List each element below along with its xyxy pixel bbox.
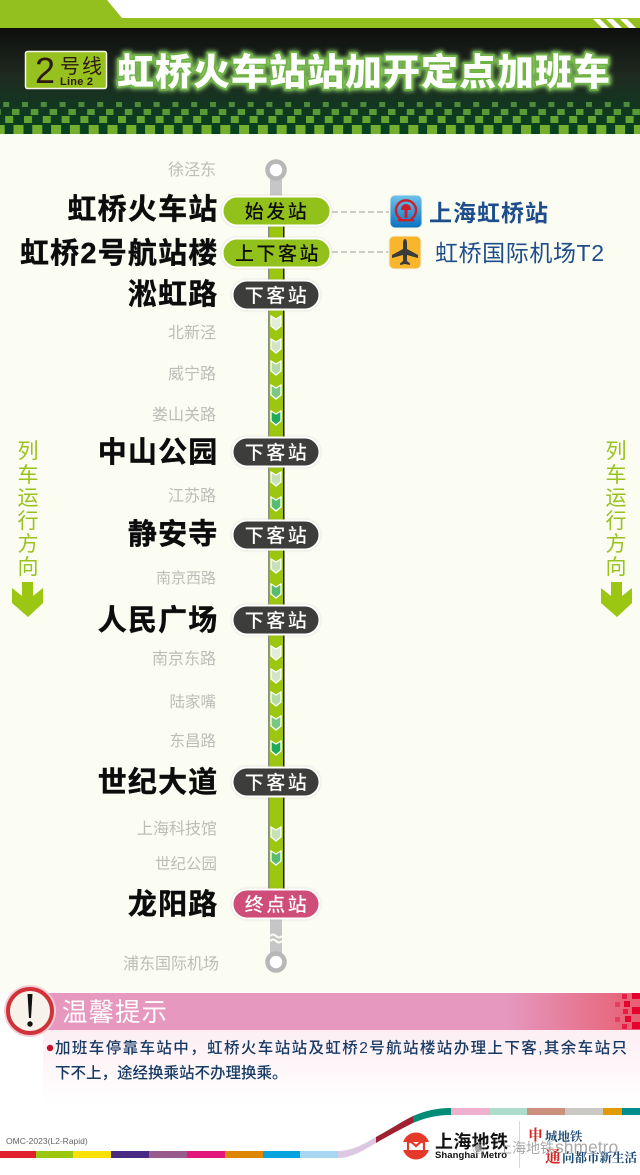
- notice heading: 温馨提示: [62, 999, 168, 1027]
- pill: 终点站: [232, 890, 320, 918]
- station names: 威宁路: [168, 365, 216, 383]
- icon: exclamation: [4, 985, 56, 1037]
- station names: 世纪公园: [155, 855, 217, 873]
- label: 虹桥国际机场T2: 虹桥国际机场T2: [435, 240, 604, 266]
- icon: airplane: [389, 236, 421, 269]
- metro logo: Shanghai Metro: [435, 1150, 507, 1161]
- decorative red checks: [615, 993, 640, 1029]
- title: 虹桥火车站站加开定点加班车: [117, 51, 610, 93]
- pill: 始发站: [222, 196, 330, 226]
- station names: 陆家嘴: [169, 693, 216, 711]
- station names: 虹桥火车站: [67, 193, 218, 226]
- title: 虹桥火车站站加开定点加班车: [117, 51, 610, 93]
- left direction label: 行: [18, 510, 38, 533]
- icon: railway station: [390, 195, 422, 228]
- pill: 下客站 静安寺: 下客站: [245, 525, 309, 547]
- right direction label: 向: [606, 556, 626, 579]
- slogan: [528, 1126, 638, 1166]
- station names: 虹桥2号航站楼: [20, 237, 218, 270]
- pill: 上下客站 虹桥2号航站楼: [222, 238, 330, 268]
- right direction label: 运: [606, 487, 626, 510]
- header band: [0, 0, 640, 134]
- right direction label: 车: [606, 464, 626, 487]
- footer colour strip: [0, 1108, 640, 1158]
- notice heading band: [30, 993, 640, 1030]
- station names: 静安寺: [128, 518, 218, 551]
- right direction label: 列: [606, 440, 626, 463]
- pill: 下客站 世纪大道: 下客站: [245, 772, 309, 794]
- metro logo: 上海地铁: [435, 1132, 508, 1152]
- pill: 终点站: 终点站: [245, 894, 309, 916]
- pill: 下客站 人民广场: 下客站: [245, 610, 309, 632]
- divider: [519, 1121, 520, 1168]
- left direction label: 方: [18, 533, 38, 556]
- right direction label: 方: [606, 533, 626, 556]
- left direction label: 列: [18, 440, 38, 463]
- right direction label: [601, 440, 632, 617]
- station names: 淞虹路: [128, 278, 218, 311]
- pill: 上下客站 虹桥2号航站楼: 上下客站: [235, 243, 321, 265]
- connector lines: [332, 212, 389, 252]
- station names: 龙阳路: [128, 888, 218, 921]
- left direction label: 车: [18, 464, 38, 487]
- left direction label: 运: [18, 487, 38, 510]
- pill: 下客站 世纪大道: [232, 768, 320, 796]
- pill: 下客站 中山公园: [232, 438, 320, 466]
- label: 上海虹桥站: 上海虹桥站: [429, 200, 549, 226]
- slogan: 通: [545, 1148, 561, 1166]
- station names: 南京东路: [152, 650, 216, 668]
- footer code: OMC-2023(L2-Rapid): [6, 1136, 88, 1146]
- title: 虹桥火车站站加开定点加班车: [117, 51, 610, 93]
- slogan: 城地铁: [545, 1129, 583, 1144]
- icon: right down arrow: [601, 582, 632, 617]
- station names: 北新泾: [168, 324, 216, 342]
- line 2 badge: Line 2: [60, 76, 93, 88]
- pill: 下客站 中山公园: 下客站: [245, 442, 309, 464]
- pill: 下客站 淞虹路: [232, 280, 320, 310]
- station names: 中山公园: [98, 436, 218, 469]
- station names: 娄山关路: [152, 406, 216, 424]
- right direction label: 行: [606, 510, 626, 533]
- station names: 上海科技馆: [137, 820, 217, 838]
- direction chevrons: [271, 316, 281, 865]
- left direction label: [12, 440, 43, 617]
- line 2 badge: [26, 50, 106, 91]
- icon: left down arrow: [12, 582, 43, 617]
- pill: 下客站 静安寺: [232, 520, 320, 550]
- station names: [20, 161, 219, 973]
- notice text: 加班车停靠车站中，虹桥火车站站及虹桥2号航站楼站办理上下客,其余车站只: [55, 1038, 627, 1057]
- notice panel: [0, 985, 640, 1175]
- line 2 badge: 2: [35, 50, 55, 91]
- station names: 人民广场: [98, 604, 218, 637]
- watermark: shmetro: [555, 1137, 618, 1157]
- notice bullet: [47, 1045, 53, 1051]
- slogan: 向都市新生活: [562, 1150, 638, 1165]
- pill: 下客站 人民广场: [232, 606, 320, 634]
- left direction label: 向: [18, 556, 38, 579]
- pill: 下客站 淞虹路: 下客站: [245, 285, 309, 307]
- station names: 世纪大道: [98, 766, 218, 799]
- watermark: ◉: [472, 1141, 485, 1156]
- line 2 badge: 号线: [60, 55, 102, 78]
- station names: 徐泾东: [168, 161, 216, 179]
- watermark: 上海地铁: [498, 1140, 554, 1156]
- notice text: 下不上，途经换乘站不办理换乘。: [55, 1063, 288, 1082]
- metro logo: [402, 1132, 508, 1161]
- slogan: 申: [528, 1126, 543, 1144]
- pill: 始发站: 始发站: [245, 201, 309, 223]
- line track: [268, 162, 284, 970]
- station names: 浦东国际机场: [123, 955, 219, 973]
- station names: 南京西路: [156, 570, 216, 587]
- station names: 东昌路: [169, 732, 216, 750]
- station names: 江苏路: [168, 487, 216, 505]
